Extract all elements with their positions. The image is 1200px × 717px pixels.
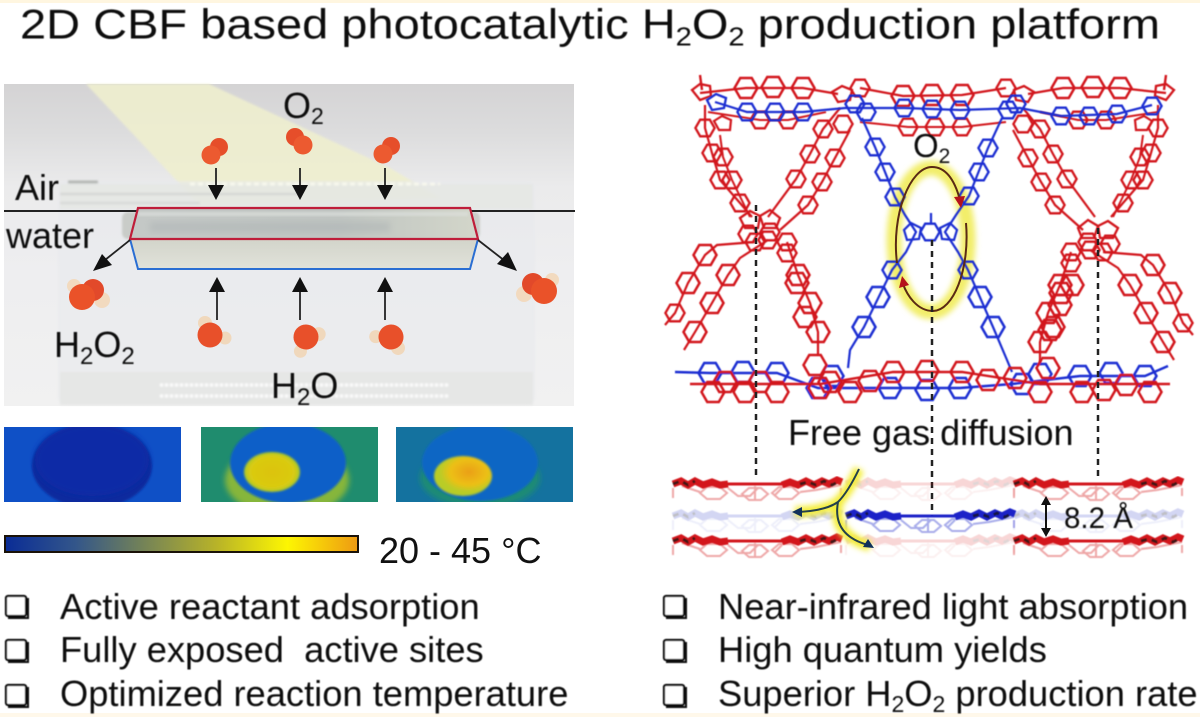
title: 2D CBF based photocatalytic H (20, 0, 606, 48)
right checklist: O (904, 673, 933, 714)
bottom framework rows (675, 355, 1170, 402)
glass dish (58, 181, 535, 405)
thermal image 2 (201, 427, 378, 502)
labels: H (271, 365, 297, 406)
labels: 2 (121, 343, 135, 370)
left checklist: Optimized reaction temperature (60, 673, 568, 714)
right checklist: 2 (933, 691, 945, 717)
labels: 2 (297, 384, 310, 411)
right checklist: production rate (945, 673, 1198, 714)
labels: 2 (311, 103, 324, 129)
labels: water (5, 215, 94, 256)
temperature range label: 20 - 45 °C (379, 530, 541, 571)
free gas diffusion label: Free gas diffusion (788, 412, 1074, 453)
red top and bottom layers (673, 480, 1183, 557)
extra right-hand chain (1038, 275, 1084, 340)
interface line (4, 210, 575, 212)
thermal image 3 (396, 427, 573, 502)
right checklist: 2 (892, 691, 904, 717)
labels: O (93, 324, 121, 365)
blue framework (707, 94, 1162, 372)
dashed guide lines (756, 205, 1098, 516)
rotation loop arrows (896, 167, 967, 311)
color scale bar (5, 530, 541, 571)
light beam (86, 84, 440, 205)
left checklist: Fully exposed active sites (60, 629, 484, 670)
labels: O (310, 365, 338, 406)
right checklist: High quantum yields (718, 629, 1047, 670)
labels: Air (15, 167, 59, 208)
O2 label: 2 (939, 145, 950, 168)
faded blue layers (673, 512, 1183, 532)
layer spacing arrow (1041, 496, 1051, 537)
right checklist: Superior H (718, 673, 892, 714)
photo background (4, 84, 574, 406)
blue centre layer (846, 512, 1015, 532)
labels: O (283, 85, 311, 126)
layer spacing value: 8.2 Å (1064, 502, 1133, 535)
arrows diagonal (93, 240, 517, 271)
side view of stacked layers (673, 480, 1183, 557)
catalyst film with red and blue outline (130, 208, 478, 269)
panel: molecular framework (665, 75, 1193, 516)
left checklist: Active reactant adsorption (60, 586, 480, 627)
title: 2 (676, 22, 692, 52)
O2 molecules (202, 128, 400, 164)
title: 2 (728, 22, 745, 52)
labels (5, 85, 338, 411)
labels: 2 (80, 343, 93, 370)
right checklist: Near-infrared light absorption (718, 586, 1188, 627)
water molecules (198, 316, 407, 361)
H2O2 molecules (67, 273, 559, 310)
left checklist (6, 586, 568, 714)
yellow glow (894, 168, 968, 312)
gas diffusion arrows (792, 469, 874, 548)
panel: air-water photocatalysis photo (4, 84, 575, 411)
porphyrin core (904, 213, 957, 240)
title: production platform (745, 0, 1160, 48)
title: O (692, 0, 728, 48)
arrows down (208, 168, 393, 200)
right checklist (664, 586, 1198, 717)
labels: H (54, 324, 80, 365)
arrows up (209, 277, 393, 320)
O2 label: O (913, 127, 939, 164)
central top rows (860, 85, 1006, 135)
faded red layers (846, 480, 1015, 557)
thermal image 1 (4, 427, 181, 502)
red framework (665, 75, 1193, 365)
panel: thermal images (4, 423, 573, 516)
